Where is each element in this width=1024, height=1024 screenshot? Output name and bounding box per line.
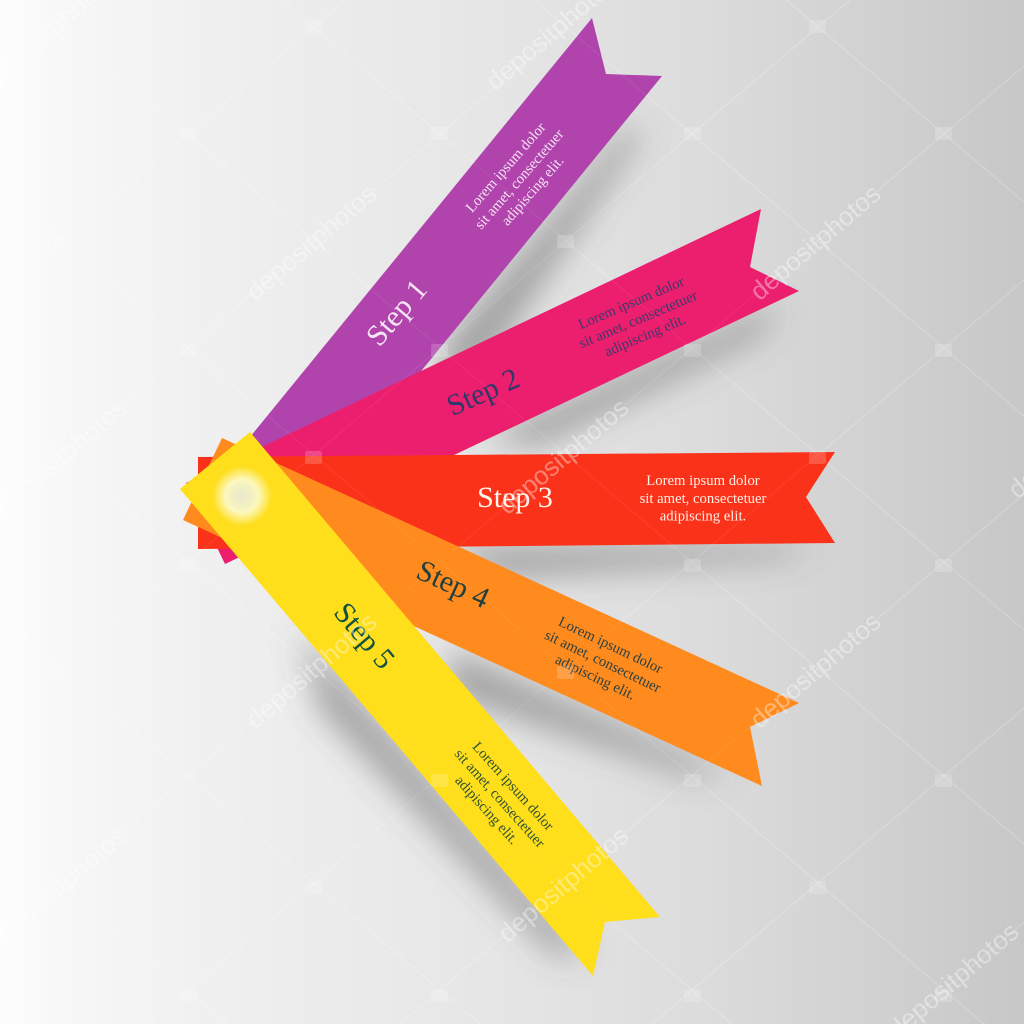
ribbon shadows <box>300 125 815 955</box>
step 5 description: Lorem ipsum dolor <box>469 739 557 834</box>
watermarks: depositphotos <box>240 178 382 306</box>
step 1 description: adipiscing elit. <box>499 153 567 229</box>
step 4 description: Lorem ipsum dolor <box>556 614 665 677</box>
step 4 description: adipiscing elit. <box>553 652 638 704</box>
watermarks: depositphotos <box>240 606 382 734</box>
step 3 description: adipiscing elit. <box>660 508 746 524</box>
step 2 label: Step 2 <box>442 362 524 423</box>
step 2 description: adipiscing elit. <box>602 312 688 360</box>
step 3 label: Step 3 <box>477 481 553 514</box>
step 3 description: Lorem ipsum dolor <box>646 473 760 489</box>
step 3 description: sit amet, consectetuer <box>640 491 767 507</box>
ribbon: step 2 <box>186 209 799 564</box>
step 4 label: Step 4 <box>412 554 494 615</box>
step 2 description: Lorem ipsum dolor <box>576 274 687 333</box>
pin glow <box>212 466 272 526</box>
step 5 description: sit amet, consectetuer <box>451 746 548 851</box>
watermarks: depositphotos <box>492 820 634 948</box>
ribbon: step 1 <box>250 18 662 495</box>
step 1 description: sit amet, consectetuer <box>472 126 567 233</box>
step 1 description: Lorem ipsum dolor <box>463 120 549 216</box>
step 5 label: Step 5 <box>327 596 401 675</box>
watermarks: depositphotos <box>744 178 886 306</box>
ribbon: step 3 <box>198 452 835 549</box>
watermarks: depositphotos <box>744 606 886 734</box>
step 2 description: sit amet, consectetuer <box>577 288 700 352</box>
ribbon: step 5 <box>180 432 660 976</box>
step 4 description: sit amet, consectetuer <box>542 627 663 696</box>
step 1 label: Step 1 <box>360 273 434 352</box>
watermarks: depositphotos <box>492 392 634 520</box>
step 5 description: adipiscing elit. <box>451 773 521 848</box>
ribbon: step 4 <box>183 438 799 786</box>
